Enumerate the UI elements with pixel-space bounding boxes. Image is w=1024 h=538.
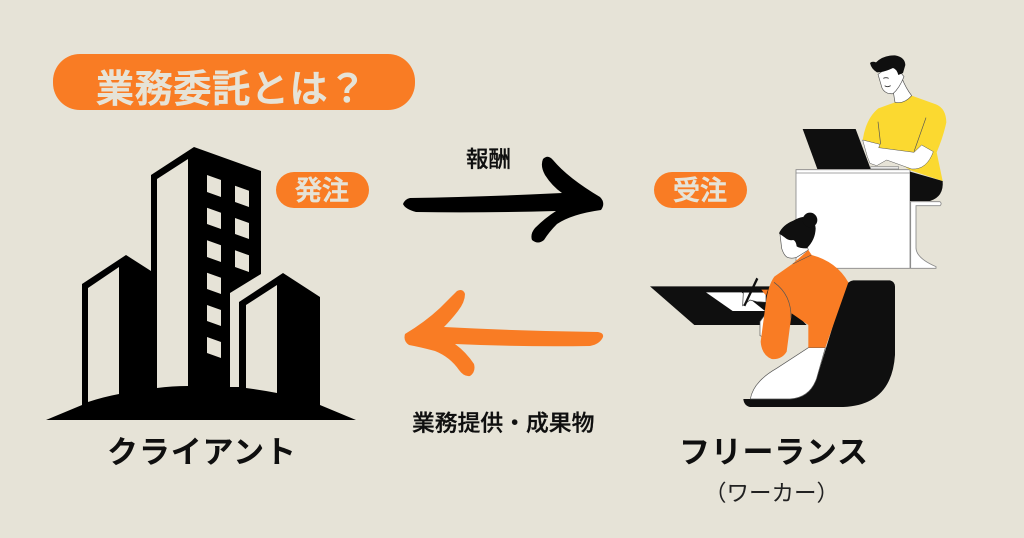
illustration: man at laptop (796, 55, 946, 268)
hand (743, 292, 766, 306)
title pill: 業務委託とは？ (53, 54, 415, 111)
legs (750, 348, 825, 399)
sweater (761, 250, 848, 359)
hair (870, 55, 905, 75)
arm (863, 140, 933, 169)
icon: office buildings (46, 147, 356, 420)
laptop (803, 129, 871, 169)
pen (743, 278, 758, 306)
title pill: 業務委託とは？: 業務委託とは？ (96, 69, 367, 111)
label: クライアント: クライアント (107, 435, 296, 470)
eye and mouth (883, 78, 891, 87)
paper (706, 292, 765, 311)
tag: 受注 (654, 172, 747, 208)
shorts (910, 172, 943, 201)
shirt (863, 96, 946, 181)
arrow: orange, freelancer to client (404, 290, 603, 376)
sweater cuff (761, 290, 768, 296)
chair (743, 280, 895, 407)
arrow: black, client to freelancer (403, 157, 603, 242)
label: 報酬: 報酬 (466, 147, 511, 172)
tag: 発注: 発注 (295, 176, 349, 206)
face (878, 63, 904, 94)
drawing desk (650, 286, 807, 325)
stool (911, 202, 941, 268)
neck and face (780, 234, 808, 258)
neck (893, 78, 912, 103)
tag: 発注 (276, 172, 369, 208)
bun (803, 213, 817, 227)
forearm (760, 313, 767, 338)
tag: 受注: 受注 (673, 176, 727, 206)
illustration: woman at drawing desk (650, 213, 895, 407)
label: フリーランス: フリーランス (679, 435, 868, 470)
label: （ワーカー）: （ワーカー） (704, 481, 839, 506)
hair (779, 217, 816, 248)
label: 業務提供・成果物: 業務提供・成果物 (412, 410, 594, 436)
desk (796, 170, 910, 268)
shirt lines (878, 118, 926, 152)
